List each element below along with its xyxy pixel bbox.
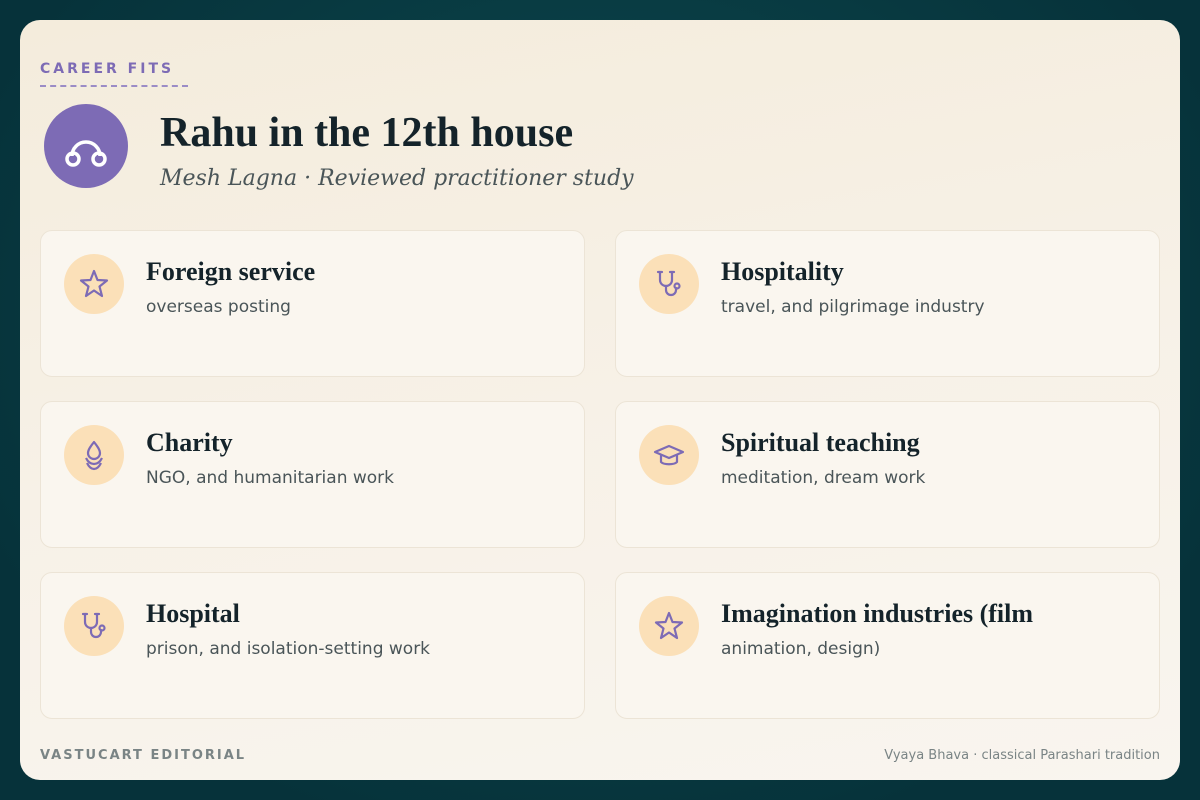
card: hospital (40, 572, 585, 719)
footer left: VASTUCART EDITORIAL (40, 748, 246, 763)
card: foreign service (40, 230, 585, 377)
card: imagination industries (615, 572, 1160, 719)
card: charity: Charity (146, 428, 233, 457)
card: hospitality: travel, and pilgrimage industry (721, 297, 985, 317)
kicker: career fits (40, 61, 188, 87)
card: hospitality (615, 230, 1160, 377)
title: Rahu in the 12th house (160, 110, 573, 156)
kicker: career fits: CAREER FITS (40, 61, 174, 77)
card: spiritual teaching: meditation, dream work (721, 468, 925, 488)
card: foreign service: overseas posting (146, 297, 291, 317)
icon: stethoscope (639, 254, 699, 314)
card: foreign service: Foreign service (146, 257, 315, 286)
icon: graduation cap (639, 425, 699, 485)
icon: rahu logo (44, 104, 128, 188)
card: spiritual teaching (615, 401, 1160, 548)
card: imagination industries: Imagination industries (film (721, 599, 1033, 628)
subtitle: Mesh Lagna · Reviewed practitioner study (160, 166, 634, 191)
card: charity (40, 401, 585, 548)
icon: stethoscope (64, 596, 124, 656)
card: hospitality: Hospitality (721, 257, 844, 286)
card: hospital: prison, and isolation-setting work (146, 639, 430, 659)
icon: star (64, 254, 124, 314)
icon: flame (64, 425, 124, 485)
card: charity: NGO, and humanitarian work (146, 468, 394, 488)
icon: star (639, 596, 699, 656)
footer right: Vyaya Bhava · classical Parashari tradition (884, 748, 1160, 763)
card: spiritual teaching: Spiritual teaching (721, 428, 920, 457)
card: hospital: Hospital (146, 599, 240, 628)
card: imagination industries: animation, design) (721, 639, 880, 659)
